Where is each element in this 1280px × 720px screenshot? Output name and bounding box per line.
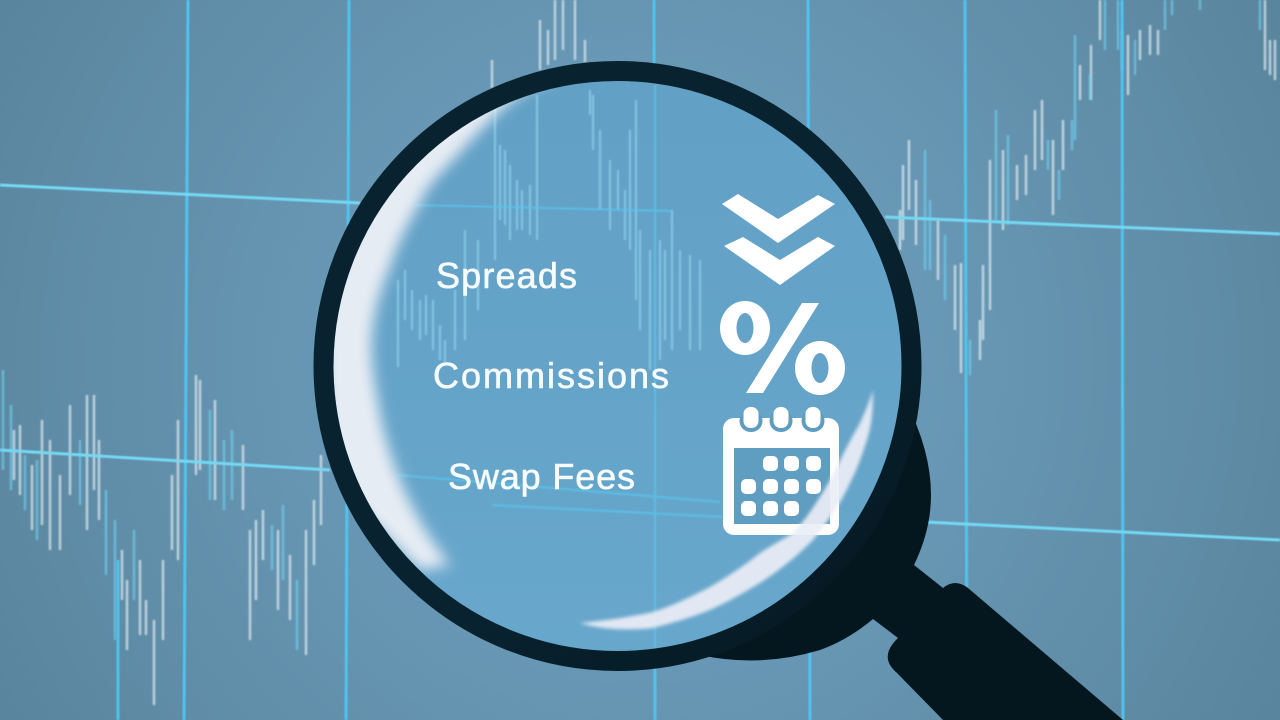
lens rim bbox=[324, 71, 912, 661]
magnifying lens bbox=[320, 70, 912, 661]
label: swap fees: Swap Fees bbox=[448, 456, 635, 497]
candlestick chart: top centre bbox=[492, 0, 585, 88]
glare: upper left crescent bbox=[334, 89, 552, 578]
candlestick chart: left bbox=[3, 370, 321, 705]
icon: percent sign bbox=[720, 301, 845, 395]
candlestick chart: right bbox=[900, 0, 1275, 375]
label: spreads: Spreads bbox=[436, 255, 577, 296]
icon: double chevron down bbox=[722, 194, 835, 285]
lens glass bbox=[334, 80, 902, 652]
icon: calendar bbox=[723, 407, 839, 535]
magnified chart inside lens bbox=[397, 70, 723, 650]
label: commissions: Commissions bbox=[433, 355, 669, 396]
dark handle and lens collar bbox=[700, 400, 1123, 720]
glare: lower right crescent bbox=[580, 390, 873, 629]
